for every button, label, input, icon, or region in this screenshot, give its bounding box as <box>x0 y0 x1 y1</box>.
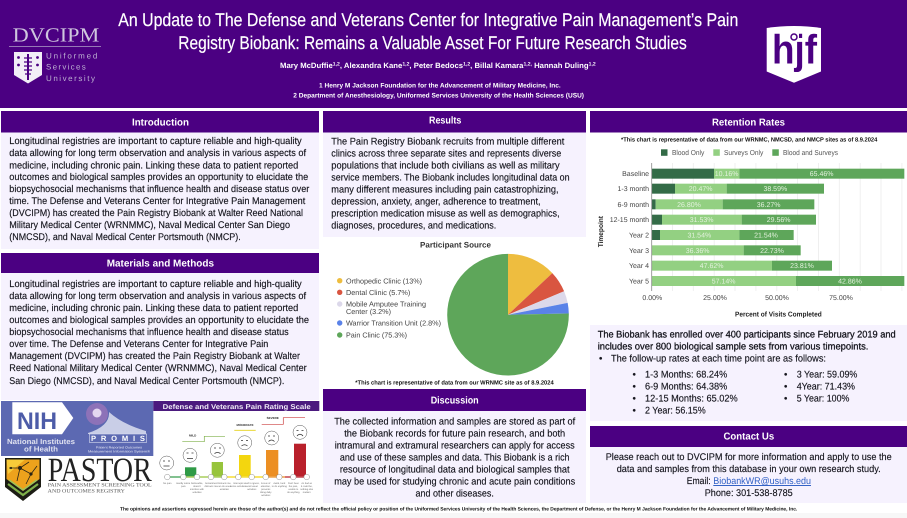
header banner <box>0 0 907 108</box>
heading: results: Results <box>429 116 462 127</box>
y axis labels: 12-15 month <box>610 216 649 224</box>
discussion text: resource of longitudinal data and biological samples that <box>340 464 570 476</box>
follow-up rates list <box>632 370 858 417</box>
authors: 1,2 <box>589 62 596 68</box>
materials text: San Diego (NMCSD), and Naval Medical Center Portsmouth (NMCP). <box>9 376 284 387</box>
pain scale descriptions: Hard to ignore, <box>244 482 260 485</box>
pain scale descriptions: activities <box>247 488 257 491</box>
follow-up rates list: • <box>632 406 636 417</box>
logo: DVCIPM Uniformed Services University: Uniformed <box>46 52 97 61</box>
bar value labels: 42.86% <box>838 278 862 286</box>
pain scale descriptions: Focus of <box>261 482 271 485</box>
results text: service members. The Biobank includes longitudinal data on <box>331 172 570 183</box>
bar value labels: 36.27% <box>757 202 781 209</box>
logo: NIH and PROMIS: National Institutes <box>7 437 75 446</box>
y axis labels: 1-3 month <box>617 185 649 193</box>
heading: contact us: Contact Us <box>724 431 775 442</box>
bars <box>652 169 904 286</box>
logo: PASTOR: AND OUTCOMES REGISTRY <box>48 488 125 494</box>
pain scale descriptions: do anything <box>287 491 300 494</box>
pie legend: Dental Clinic (5.7%) <box>346 288 410 297</box>
materials text <box>9 279 309 387</box>
pie legend: Center (3.2%) <box>346 307 391 316</box>
materials text: Longitudinal registries are important to capture reliable and high-quality <box>9 279 302 290</box>
pain scale descriptions: avoid usual <box>246 485 258 488</box>
follow-up rates list: 12-15 Months: 65.02% <box>645 394 738 405</box>
logo: NIH and PROMIS <box>1 401 153 456</box>
results text: prescription medication misuse as well as demographics, <box>331 208 560 219</box>
pain scale descriptions: Noticeable, <box>191 482 203 485</box>
follow-up rates list: • <box>632 394 636 405</box>
panel: biobank enrollment stats <box>590 325 907 421</box>
pie note: *This chart is representative of data from our WRNMC site as of 8.9.2024 <box>355 379 554 386</box>
panel: biobank enrollment stats: includes over 800 biological sample sets from various timepoints. <box>598 342 868 353</box>
heading: discussion: Discussion <box>431 396 479 407</box>
y axis labels: Year 4 <box>629 263 649 270</box>
y axis labels: Year 2 <box>629 232 649 240</box>
panel: contact us <box>590 426 907 503</box>
materials text: Management (DVCIPM) has created the Pain Registry Biobank at Walter <box>9 351 301 362</box>
results text: diagnoses, procedures, and medications. <box>331 220 496 231</box>
pie title: Participant Source <box>420 240 492 249</box>
panel: biobank enrollment stats: The follow-up rates at each time point are as follows: <box>611 354 826 365</box>
pie legend: Warrior Transition Unit (2.8%) <box>346 318 441 328</box>
pain scale descriptions: doesn't <box>193 485 201 488</box>
panel: biobank enrollment stats: The Biobank has enrolled over 400 participants since February 2019 and <box>598 330 896 341</box>
affiliations <box>293 82 584 100</box>
pain scale descriptions: nothing else <box>300 488 314 491</box>
affiliations: 2 Department of Anesthesiology, Uniformed Services University of the Health Sciences (USU) <box>293 93 584 100</box>
logo: DVCIPM Uniformed Services University <box>9 25 101 84</box>
contact text: Please reach out to DVCIPM for more information and apply to use the <box>606 452 892 463</box>
bar value labels: 38.59% <box>763 186 787 193</box>
logo: NIH and PROMIS: of Health <box>24 445 59 454</box>
materials text: data allowing for long term observation and analysis in various aspects of <box>9 291 306 302</box>
logo: PASTOR: PASTOR <box>48 452 152 489</box>
bar value labels <box>677 171 862 286</box>
panel: biobank enrollment stats: • <box>599 354 603 365</box>
discussion text: may be used for studying chronic and acute pain conditions <box>334 476 575 488</box>
heading: introduction: Introduction <box>132 118 189 129</box>
NIH arrow mark: NIH <box>17 408 57 435</box>
discussion text <box>334 416 575 500</box>
introduction text: data allowing for long term observation and analysis in various aspects of <box>9 148 306 159</box>
results text: many different measures including pain catastrophizing, <box>331 184 559 195</box>
discussion text: and other diseases. <box>416 488 494 500</box>
follow-up rates list: • <box>632 370 636 381</box>
introduction text: Longitudinal registries are important to capture reliable and high-quality <box>9 136 302 147</box>
results text: The Pain Registry Biobank recruits from multiple different <box>331 136 565 147</box>
results text: clinics across three separate sites and represents diverse <box>331 148 561 159</box>
chart: Defense and Veterans Pain Rating Scale <box>153 401 319 497</box>
severity labels: MODERATE <box>237 423 253 427</box>
pain scale descriptions: Distracts me, <box>217 482 232 485</box>
introduction text: biopsychosocial mechanisms that influence health and disease status over <box>9 184 310 195</box>
PROMIS mark: PROMIS <box>91 434 145 443</box>
contact text: data and samples from this database in your own research study. <box>617 464 881 475</box>
bar value labels: 22.73% <box>760 248 784 255</box>
logo: PASTOR <box>5 452 152 501</box>
pain scale descriptions: Sometimes <box>205 482 218 485</box>
pain scale descriptions: attention, <box>261 485 271 488</box>
PROMIS mark: Patient Reported Outcomes <box>96 445 142 449</box>
severity axis <box>164 474 310 480</box>
PROMIS mark: Measurement Information System® <box>88 450 151 454</box>
discussion text: the Biobank records for future pain research, and both <box>344 428 565 439</box>
pain scale descriptions: pain <box>181 485 186 488</box>
pain scale descriptions: Hardly notice <box>176 482 191 485</box>
pain scale descriptions: activities <box>220 488 230 491</box>
bar value labels: 47.62% <box>700 263 724 270</box>
pie legend <box>337 276 441 340</box>
pie <box>447 254 569 376</box>
heading: materials and methods: Materials and Methods <box>107 258 214 269</box>
y axis labels <box>610 170 649 286</box>
footer disclaimer: The opinions and assertions expressed herein are those of the author(s) and do not reflect the official policy or position of the Uniformed Services University of the Health Sciences, the Department of Defense, or the Henry M Jackson Foundation for the Advancement of Military Medicine, Inc. <box>120 507 798 513</box>
authors: 1,2, <box>523 62 533 68</box>
pain scale descriptions: As bad as <box>301 482 313 485</box>
introduction text: (DVCIPM) has created the Pain Registry Biobank at Walter Reed National <box>9 208 303 219</box>
authors: 1,2 <box>333 62 340 68</box>
results text: populations that include both civilians as well as military <box>331 160 560 171</box>
y axis labels: Year 3 <box>629 248 649 255</box>
pie legend: Mobile Amputee Training <box>346 300 426 308</box>
logo: DVCIPM Uniformed Services University: Services <box>46 63 86 72</box>
x axis labels: 50.00% <box>765 295 789 302</box>
results text <box>331 136 570 231</box>
materials text: Reed National Military Medical Center (WRNMMC), Naval Medical Center <box>9 363 307 374</box>
pain scale descriptions: it could be, <box>301 485 313 488</box>
follow-up rates list: • <box>784 382 788 393</box>
bar legend: Blood and Surveys <box>783 148 838 157</box>
follow-up rates list: 3 Year: 59.09% <box>797 370 858 381</box>
pain scale descriptions: Awful, hard <box>273 482 286 485</box>
pain scale descriptions: No pain <box>163 482 172 485</box>
authors: 1,2 <box>463 62 470 68</box>
pain scale descriptions: matters <box>303 491 311 494</box>
authors: Hannah Duling <box>532 61 589 70</box>
PROMIS mark <box>86 403 151 454</box>
logo: hjf: hjf <box>772 26 817 72</box>
pain scale descriptions: activities <box>192 491 202 494</box>
bar legend: Blood Only <box>672 148 705 157</box>
pain scale descriptions: the pain, <box>289 485 298 488</box>
pain scale descriptions: prevents <box>261 488 271 491</box>
severity labels: MILD <box>189 434 197 438</box>
authors: , Peter Bedocs <box>409 61 463 70</box>
stacked bar chart <box>597 163 904 319</box>
materials text: outcomes and biological samples provides an opportunity to elucidate the <box>9 315 309 326</box>
contact text: BiobankWR@usuhs.edu <box>713 476 811 487</box>
follow-up rates list: 1-3 Months: 68.24% <box>645 370 728 381</box>
materials text: medicine, including chronic pain. Linking these data to patient reported <box>9 303 298 314</box>
bar value labels: 57.14% <box>712 278 736 286</box>
bar value labels: 29.56% <box>767 217 791 224</box>
authors: , Alexandra Kane <box>340 61 402 70</box>
pie legend: Orthopedic Clinic (13%) <box>346 276 422 285</box>
discussion text: intramural and extramural researchers can apply for access <box>335 440 575 452</box>
contact text <box>606 452 892 499</box>
severity bars <box>185 444 306 476</box>
bar value labels: 20.47% <box>689 186 713 193</box>
y axis labels: Baseline <box>622 170 649 178</box>
bar value labels: 36.36% <box>686 248 710 255</box>
pain scale descriptions: Interrupts <box>233 482 244 485</box>
bar value labels: 26.80% <box>677 202 701 209</box>
introduction text: time. The Defense and Veterans Center for Integrative Pain Management <box>9 196 306 207</box>
pain scale descriptions: unable to <box>288 488 299 491</box>
panel: retention rates <box>590 111 907 319</box>
logo: PASTOR: PAIN ASSESSMENT SCREENING TOOL <box>48 482 152 488</box>
x axis labels: 25.00% <box>703 295 727 302</box>
contact text: Email: <box>687 476 711 487</box>
bar legend: Surveys Only <box>724 148 764 157</box>
introduction text: medicine, including chronic pain. Linking these data to patient reported <box>9 160 298 171</box>
title: Registry Biobank: Remains a Valuable Asset For Future Research Studies <box>178 32 687 53</box>
discussion text: and use of these samples and data. This Biobank is a rich <box>340 452 570 464</box>
title <box>118 9 738 53</box>
contact text: Phone: 301-538-8785 <box>705 488 793 499</box>
title: An Update to The Defense and Veterans Center for Integrative Pain Management’s Pain <box>118 9 738 30</box>
y axis labels: 6-9 month <box>617 201 649 209</box>
follow-up rates list: • <box>632 382 636 393</box>
PASTOR shield <box>5 458 41 501</box>
authors: , Billal Kamara <box>470 61 524 70</box>
authors: Mary McDuffie <box>280 61 332 70</box>
introduction text: (NMCSD), and Naval Medical Center Portsmouth (NMCP). <box>9 232 241 243</box>
pain scale descriptions: can do usual <box>218 485 232 488</box>
affiliations: 1 Henry M Jackson Foundation for the Advancement of Military Medicine, Inc. <box>319 82 561 89</box>
follow-up rates list: 6-9 Months: 64.38% <box>645 382 728 393</box>
logo: DVCIPM Uniformed Services University: University <box>46 74 95 83</box>
pain scale descriptions: interfere with <box>190 488 205 491</box>
retention note: *This chart is representative of data from our WRNMC, NMCSD, and NMCP sites as of 8.9.2024 <box>621 137 878 144</box>
discussion text: The collected information and samples are stored as part of <box>334 416 575 427</box>
pain scale descriptions: activities <box>261 494 271 497</box>
materials text: biopsychosocial mechanisms that influence health and disease status <box>9 327 289 338</box>
pie legend: Pain Clinic (75.3%) <box>346 330 407 340</box>
bar value labels: 31.54% <box>687 232 711 240</box>
y axis labels: Year 5 <box>629 278 649 286</box>
bar value labels: 23.81% <box>790 263 814 270</box>
chart: participant source pie <box>337 240 569 386</box>
x axis title: Percent of Visits Completed <box>735 311 822 319</box>
x axis labels: 0.00% <box>642 295 662 302</box>
panel: introduction <box>1 111 319 249</box>
pain faces <box>160 425 307 470</box>
pain scale descriptions <box>163 482 314 497</box>
panel: materials and methods <box>1 253 319 400</box>
x axis labels: 75.00% <box>829 295 853 302</box>
pain scale descriptions: distracts me <box>205 485 218 488</box>
pain scale descriptions: some activities <box>230 485 247 488</box>
follow-up rates list: • <box>784 370 788 381</box>
bar value labels: 21.54% <box>754 232 778 240</box>
follow-up rates list: • <box>784 394 788 405</box>
panel: discussion <box>323 389 586 503</box>
NIH arrow mark <box>12 402 73 435</box>
results text: depression, anxiety, anger, adherence to treatment, <box>331 196 541 207</box>
chart: Defense and Veterans Pain Rating Scale: Defense and Veterans Pain Rating Scale <box>163 403 311 411</box>
introduction text <box>9 136 310 243</box>
heading: retention rates: Retention Rates <box>712 117 785 128</box>
x axis labels <box>642 295 853 302</box>
severity labels <box>182 416 305 442</box>
bar value labels: 31.53% <box>690 217 714 224</box>
logo: DVCIPM Uniformed Services University: DVCIPM <box>13 25 100 47</box>
follow-up rates list: 2 Year: 56.15% <box>645 406 706 417</box>
pain scale descriptions: to do anything <box>272 485 287 488</box>
y axis title: Timepoint <box>597 215 605 247</box>
authors: 1,2 <box>402 62 410 68</box>
bar value labels: 65.46% <box>810 171 834 178</box>
pain scale descriptions: Can't bear <box>288 482 299 485</box>
bar value labels: 10.16% <box>715 171 739 178</box>
follow-up rates list: 4Year: 71.43% <box>797 382 855 393</box>
panel: results <box>323 111 586 237</box>
follow-up rates list: 5 Year: 100% <box>797 394 850 405</box>
bar legend <box>661 148 838 157</box>
severity labels: SEVERE <box>267 416 279 420</box>
pain scale descriptions: doing daily <box>260 491 272 494</box>
materials text: over time. The Defense and Veterans Center for Integrative Pain <box>9 339 268 350</box>
introduction text: Military Medical Center (WRNMMC), Naval Medical Center San Diego <box>9 220 290 231</box>
introduction text: outcomes and biological samples provides an opportunity to elucidate the <box>9 172 308 183</box>
